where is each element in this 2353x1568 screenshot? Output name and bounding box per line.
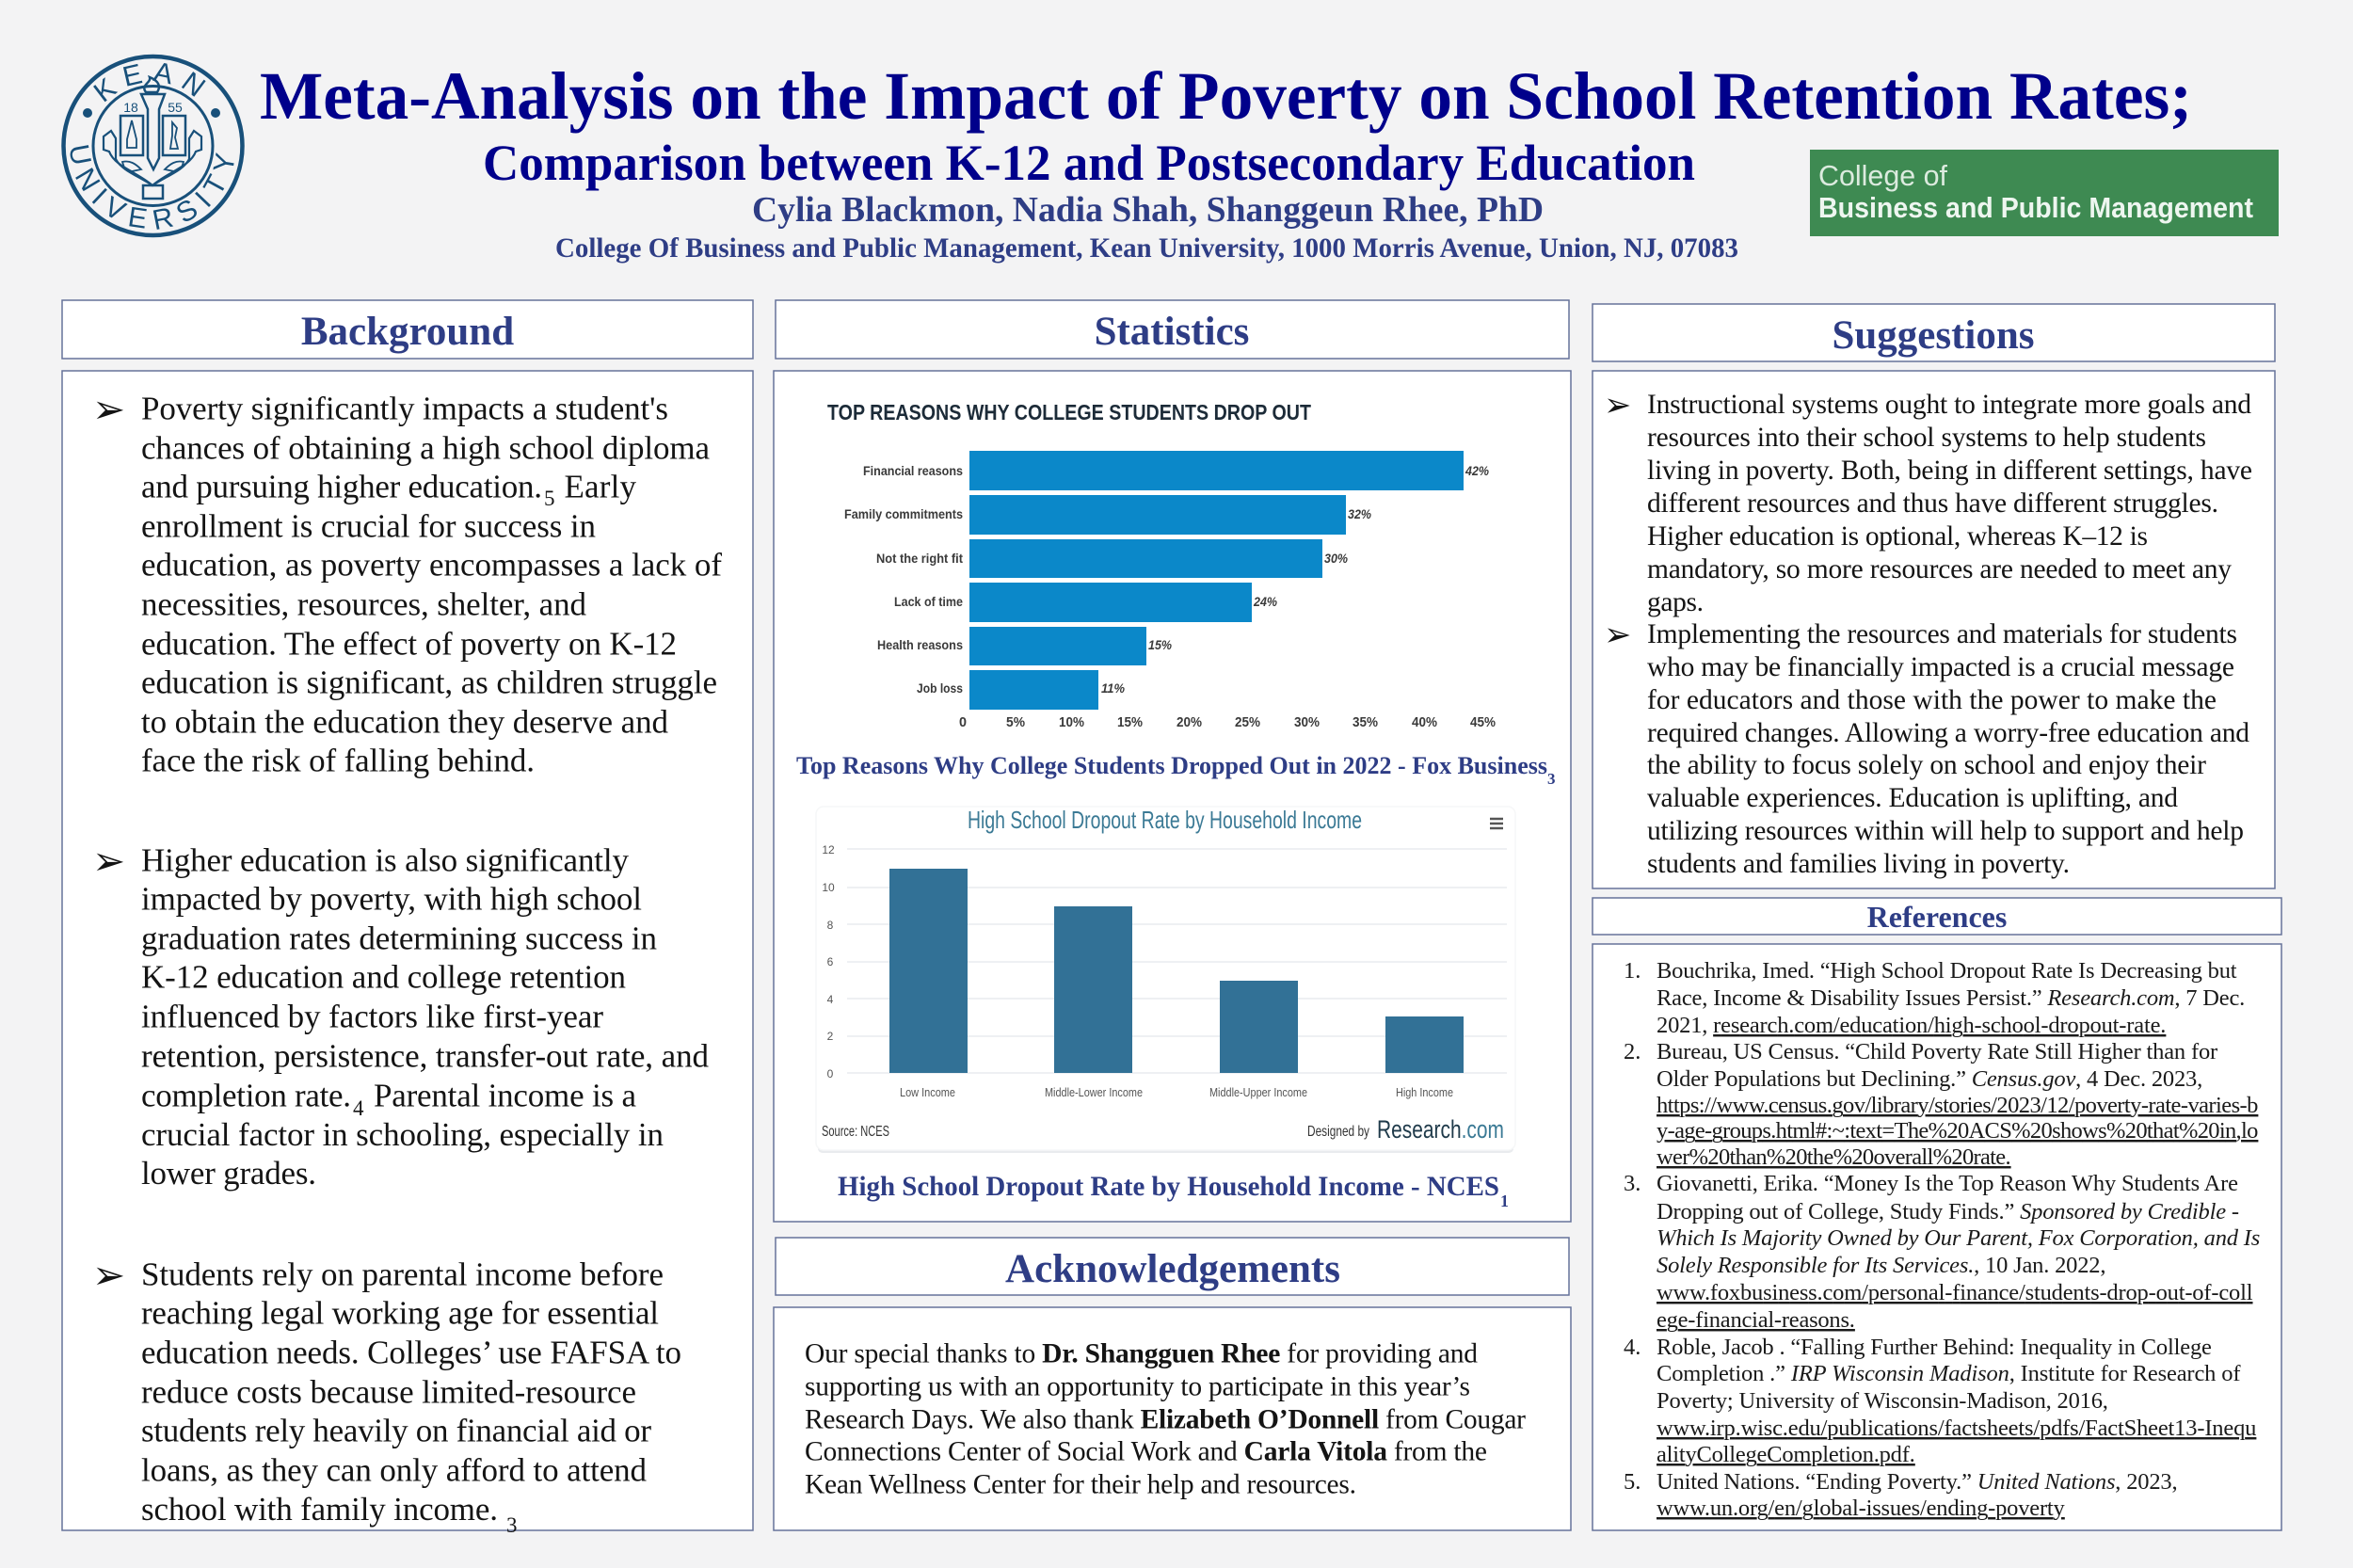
bar chart: college dropout reasons: 20% <box>1176 714 1202 730</box>
panel: references: wer%20than%20the%20overall%20rate. <box>1657 1144 2011 1170</box>
heading: References <box>1593 898 2281 935</box>
bar chart: college dropout reasons: Not the right fit <box>876 551 963 566</box>
icon: Kean University seal: UNIVERSITY <box>70 145 233 230</box>
bar chart: college dropout reasons: 42% <box>1465 463 1489 478</box>
suggestion 1: resources into their school systems to help students <box>1647 423 2206 453</box>
suggestion 1: gaps. <box>1647 587 1704 617</box>
panel: references: Bureau, US Census. “Child Poverty Rate Still Higher than for <box>1657 1039 2217 1064</box>
panel: acknowledgements: Our special thanks to Dr. Shangguen Rhee for providing and <box>805 1338 1478 1368</box>
bullet 1: education. The effect of poverty on K-12 <box>141 625 677 663</box>
bar chart: college dropout reasons: TOP REASONS WHY COLLEGE STUDENTS DROP OUT <box>827 400 1311 424</box>
bullet 1: education, as poverty encompasses a lack of <box>141 546 722 584</box>
bar chart: college dropout reasons: Health reasons <box>877 637 963 652</box>
bullet 1: face the risk of falling behind. <box>141 742 535 779</box>
bar chart: dropout rate by household income: Research.com <box>1377 1115 1504 1144</box>
panel: references: Poverty; University of Wisconsin-Madison, 2016, <box>1657 1388 2108 1414</box>
bar chart: college dropout reasons: Financial reasons <box>863 463 963 478</box>
panel: references: ege-financial-reasons. <box>1657 1307 1855 1333</box>
panel: references: 5. <box>1624 1469 1641 1495</box>
bar chart: college dropout reasons: 15% <box>1148 637 1172 652</box>
bar chart: college dropout reasons: 32% <box>1348 506 1371 521</box>
bullet 3: reaching legal working age for essential <box>141 1295 659 1331</box>
bullet 1: enrollment is crucial for success in <box>141 508 596 544</box>
suggestion 2: the ability to focus solely on school and enjoy their <box>1647 750 2206 780</box>
bullet 1: to obtain the education they deserve and <box>141 704 668 740</box>
bullet 1: education is significant, as children struggle <box>141 664 717 700</box>
bullet 3: Students rely on parental income before <box>141 1256 664 1293</box>
panel: references: Bouchrika, Imed. “High School Dropout Rate Is Decreasing but <box>1657 958 2237 984</box>
bar chart: college dropout reasons: 24% <box>1253 594 1277 609</box>
panel: references: Dropping out of College, Study Finds.” Sponsored by Credible - <box>1657 1199 2239 1224</box>
panel: background <box>62 371 753 1537</box>
bar chart: college dropout reasons: 35% <box>1353 714 1378 730</box>
bullet 1: Early <box>565 469 636 504</box>
bar chart: dropout rate by household income: Designed by <box>1307 1124 1369 1140</box>
title: Meta-Analysis on the Impact of Poverty on School Retention Rates; <box>260 59 2192 134</box>
panel: references: Older Populations but Declining.” Census.gov, 4 Dec. 2023, <box>1657 1066 2202 1092</box>
bar chart: college dropout reasons: Family commitments <box>844 506 963 521</box>
icon: Kean University seal <box>61 55 245 237</box>
icon: Kean University seal: 55 <box>168 100 183 115</box>
panel: suggestions <box>1593 371 2275 888</box>
affiliation: College Of Business and Public Management, Kean University, 1000 Morris Avenue, Union, NJ, 07083 <box>555 233 1738 264</box>
suggestion 1: living in poverty. Both, being in different settings, have <box>1647 456 2252 486</box>
bullet 2: influenced by factors like first-year <box>141 998 603 1035</box>
bar chart: dropout rate by household income: High School Dropout Rate by Household Income <box>968 806 1362 834</box>
panel: references: y-age-groups.html#:~:text=The%20ACS%20shows%20that%20in,lo <box>1657 1118 2258 1144</box>
suggestion 2: who may be financially impacted is a crucial message <box>1647 652 2234 682</box>
bar chart: dropout rate by household income: 8 <box>827 919 834 932</box>
panel: references: Giovanetti, Erika. “Money Is the Top Reason Why Students Are <box>1657 1171 2238 1196</box>
icon: Kean University seal: KEAN <box>93 63 206 102</box>
suggestion 2: required changes. Allowing a worry-free education and <box>1647 718 2249 748</box>
bullet 2: retention, persistence, transfer-out rate, and <box>141 1037 710 1075</box>
panel: references: https://www.census.gov/library/stories/2023/12/poverty-rate-varies-b <box>1657 1093 2258 1118</box>
bar chart: dropout rate by household income: Source: NCES <box>822 1124 889 1140</box>
suggestion 2: students and families living in poverty. <box>1647 849 2070 879</box>
panel: references: Completion .” IRP Wisconsin Madison, Institute for Research of <box>1657 1361 2241 1386</box>
bullet 1: and pursuing higher education. <box>141 469 542 504</box>
suggestion 2: for educators and those with the power to make the <box>1647 685 2217 715</box>
bullet 1: 5 <box>544 487 555 510</box>
bar chart: dropout rate by household income: 4 <box>827 993 834 1006</box>
heading: Acknowledgements: Acknowledgements <box>1005 1247 1340 1291</box>
bullet 1: chances of obtaining a high school diploma <box>141 429 710 467</box>
suggestion 2: utilizing resources within will help to support and help <box>1647 816 2244 846</box>
bullet 2: K-12 education and college retention <box>141 958 626 996</box>
bar chart: college dropout reasons: 11% <box>1101 680 1126 696</box>
bullet 2: lower grades. <box>141 1155 316 1192</box>
panel: acknowledgements: Connections Center of Social Work and Carla Vitola from the <box>805 1436 1487 1466</box>
panel: references: 4. <box>1624 1335 1641 1360</box>
panel: acknowledgements: Research Days. We also thank Elizabeth O’Donnell from Cougar <box>805 1404 1526 1434</box>
panel: references: www.un.org/en/global-issues/ending-poverty <box>1657 1496 2066 1521</box>
suggestion 2 <box>1604 616 2249 879</box>
suggestion 1: ➢ <box>1604 387 1631 424</box>
heading: References: References <box>1867 900 2007 934</box>
suggestion 1: Higher education is optional, whereas K–12 is <box>1647 521 2148 552</box>
bullet 1: ➢ <box>92 386 125 432</box>
panel: references: Which Is Majority Owned by Our Parent, Fox Corporation, and Is <box>1657 1225 2260 1251</box>
panel: references: Solely Responsible for Its Services., 10 Jan. 2022, <box>1657 1253 2106 1278</box>
suggestion 1 <box>1604 387 2252 617</box>
bullet 2: completion rate. <box>141 1077 351 1114</box>
suggestion 1: different resources and thus have different struggles. <box>1647 488 2218 519</box>
bullet 2: 4 <box>353 1096 364 1120</box>
bullet 3: ➢ <box>92 1252 125 1298</box>
bullet 2: graduation rates determining success in <box>141 920 657 956</box>
caption: chart 1: Top Reasons Why College Students Dropped Out in 2022 - Fox Business <box>796 751 1547 779</box>
bullet 2: Higher education is also significantly <box>141 841 629 879</box>
college logo <box>1810 150 2279 236</box>
heading: Background: Background <box>301 310 514 354</box>
panel: references: Roble, Jacob . “Falling Further Behind: Inequality in College <box>1657 1335 2212 1360</box>
bullet 3: students rely heavily on financial aid or <box>141 1412 651 1449</box>
panel: acknowledgements: supporting us with an opportunity to participate in this year’s <box>805 1372 1470 1402</box>
heading: Statistics: Statistics <box>1095 310 1249 354</box>
panel: references: 2021, research.com/education/high-school-dropout-rate. <box>1657 1013 2166 1038</box>
bar chart: dropout rate by household income: 12 <box>822 843 835 856</box>
bullet 1: Poverty significantly impacts a student's <box>141 390 668 427</box>
bar chart: dropout rate by household income: 10 <box>822 881 835 894</box>
panel: references: alityCollegeCompletion.pdf. <box>1657 1442 1915 1467</box>
bar chart: college dropout reasons: 30% <box>1294 714 1320 730</box>
panel: references: United Nations. “Ending Poverty.” United Nations, 2023, <box>1657 1469 2178 1495</box>
panel: acknowledgements: Kean Wellness Center for their help and resources. <box>805 1470 1356 1500</box>
panel: statistics <box>774 371 1571 1222</box>
panel: acknowledgements <box>774 1307 1571 1530</box>
bullet 3: reduce costs because limited-resource <box>141 1374 636 1410</box>
bar chart: college dropout reasons: Job loss <box>917 680 963 696</box>
bar chart: dropout rate by household income: Middle-Lower Income <box>1045 1085 1143 1099</box>
suggestion 2: valuable experiences. Education is uplifting, and <box>1647 783 2178 813</box>
bullet 1 <box>92 386 722 779</box>
bullet 3: loans, as they can only afford to attend <box>141 1451 648 1489</box>
bar chart: dropout rate by household income: High Income <box>1396 1085 1453 1099</box>
panel: references: www.irp.wisc.edu/publications/factsheets/pdfs/FactSheet13-Inequ <box>1657 1416 2256 1441</box>
caption: chart 2: 1 <box>1500 1192 1509 1210</box>
bullet 2: Parental income is a <box>374 1077 636 1114</box>
bar chart: dropout rate by household income: Low Income <box>900 1085 955 1099</box>
bullet 2: crucial factor in schooling, especially in <box>141 1116 664 1153</box>
bar chart: dropout rate by household income: 0 <box>827 1067 834 1080</box>
bullet 2 <box>92 838 710 1192</box>
bar chart: dropout rate by household income <box>816 806 1515 1153</box>
bullet 3: school with family income. <box>141 1491 498 1528</box>
panel: references: www.foxbusiness.com/personal-finance/students-drop-out-of-coll <box>1657 1280 2253 1305</box>
authors: Cylia Blackmon, Nadia Shah, Shanggeun Rhee, PhD <box>752 190 1544 230</box>
bar chart: college dropout reasons: 45% <box>1470 714 1496 730</box>
heading: Background <box>62 300 753 359</box>
bar chart: college dropout reasons: 15% <box>1117 714 1143 730</box>
panel: references: 2. <box>1624 1039 1641 1064</box>
bullet 3: education needs. Colleges’ use FAFSA to <box>141 1335 681 1370</box>
college logo: Business and Public Management <box>1818 191 2253 224</box>
icon: Kean University seal: 18 <box>123 100 138 115</box>
bar chart: dropout rate by household income: 2 <box>827 1030 834 1043</box>
bar chart: dropout rate by household income: Middle-Upper Income <box>1209 1085 1307 1099</box>
heading: Statistics <box>776 300 1569 359</box>
heading: Suggestions: Suggestions <box>1832 313 2035 358</box>
bullet 2: ➢ <box>92 838 125 884</box>
suggestion 1: mandatory, so more resources are needed to meet any <box>1647 554 2232 584</box>
panel: references: Race, Income & Disability Issues Persist.” Research.com, 7 Dec. <box>1657 985 2245 1011</box>
college logo: College of <box>1818 159 1947 192</box>
bar chart: college dropout reasons: 10% <box>1059 714 1084 730</box>
bullet 3: 3 <box>506 1513 518 1537</box>
bar chart: college dropout reasons: 40% <box>1412 714 1437 730</box>
caption: chart 2: High School Dropout Rate by Household Income - NCES <box>838 1172 1499 1202</box>
panel: references: 1. <box>1624 958 1641 984</box>
bullet 1: necessities, resources, shelter, and <box>141 585 587 623</box>
bar chart: college dropout reasons: 0 <box>959 714 967 730</box>
caption: chart 1: 3 <box>1547 770 1555 788</box>
bar chart: college dropout reasons: Lack of time <box>894 594 963 609</box>
heading: Suggestions <box>1593 304 2275 361</box>
bar chart: dropout rate by household income: 6 <box>827 955 834 968</box>
suggestion 2: Implementing the resources and materials for students <box>1647 619 2237 649</box>
panel: references <box>1593 944 2281 1530</box>
suggestion 2: ➢ <box>1604 616 1631 654</box>
bar chart: college dropout reasons: 5% <box>1006 714 1025 730</box>
heading: Acknowledgements <box>776 1238 1569 1295</box>
bullet 3 <box>92 1252 681 1537</box>
bar chart: college dropout reasons: 25% <box>1235 714 1260 730</box>
bullet 2: impacted by poverty, with high school <box>141 881 642 917</box>
subtitle: Comparison between K-12 and Postsecondary Education <box>483 135 1695 191</box>
bar chart: college dropout reasons: 30% <box>1324 551 1348 566</box>
suggestion 1: Instructional systems ought to integrate more goals and <box>1647 390 2251 420</box>
bar chart: college dropout reasons <box>827 400 1496 730</box>
panel: references: 3. <box>1624 1171 1641 1196</box>
